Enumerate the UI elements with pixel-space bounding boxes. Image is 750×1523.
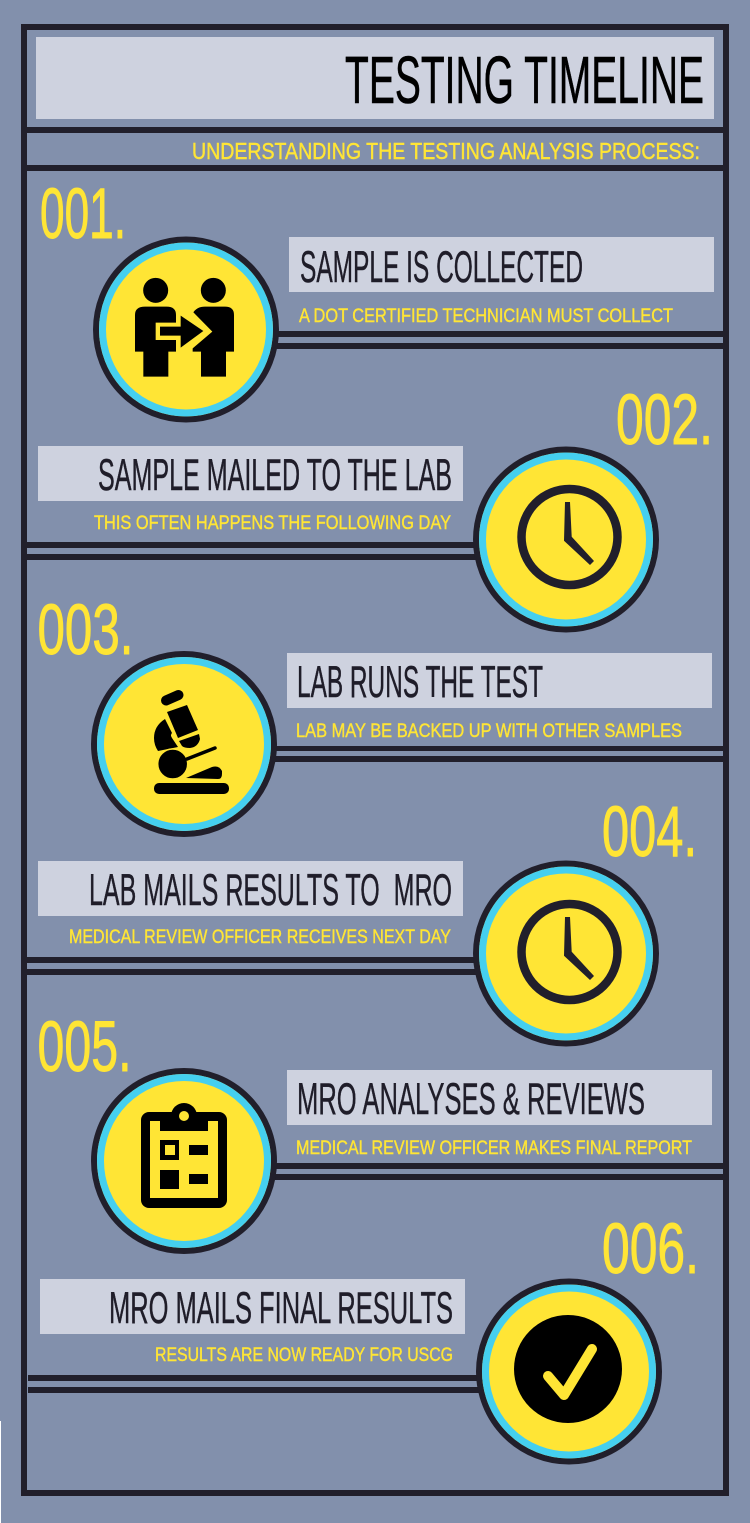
step 4 heading box: LAB MAILS RESULTS TO MRO [89, 866, 452, 915]
step 1 circle [96, 240, 276, 420]
step 1 [40, 175, 714, 420]
step 2 [38, 381, 713, 630]
icon: clock [522, 904, 618, 1000]
step 2 heading box: SAMPLE MAILED TO THE LAB [98, 451, 452, 500]
icon: two people exchanging sample [135, 278, 234, 377]
step 2 heading box [38, 446, 463, 501]
step 6 circle [479, 1282, 659, 1462]
step 4 number: 004. [602, 793, 697, 872]
step 4 [38, 793, 697, 1044]
step 2 circle [476, 450, 656, 630]
step 3 [38, 591, 712, 834]
step 2 description: THIS OFTEN HAPPENS THE FOLLOWING DAY [94, 512, 451, 534]
step 6 heading box: MRO MAILS FINAL RESULTS [109, 1284, 453, 1333]
step 3 description: LAB MAY BE BACKED UP WITH OTHER SAMPLES [296, 720, 682, 742]
step 4 circle [476, 864, 656, 1044]
step 5 number: 005. [38, 1008, 132, 1087]
step 3 number: 003. [38, 591, 134, 670]
step 6 number: 006. [602, 1210, 699, 1289]
step 5 circle [94, 1071, 274, 1251]
icon: clipboard checklist [141, 1103, 227, 1208]
icon: microscope [154, 695, 229, 794]
step 6 [40, 1210, 699, 1462]
step 1 number: 001. [40, 175, 126, 254]
step 4 description: MEDICAL REVIEW OFFICER RECEIVES NEXT DAY [69, 926, 451, 948]
icon: clock [522, 489, 618, 585]
step 6 description: RESULTS ARE NOW READY FOR USCG [155, 1344, 453, 1366]
step 3 circle [94, 654, 274, 834]
title banner [36, 37, 714, 119]
step 1 description: A DOT CERTIFIED TECHNICIAN MUST COLLECT [299, 305, 673, 327]
step 5 [38, 1008, 712, 1251]
icon: check mark [514, 1315, 622, 1423]
step 4 heading box [38, 861, 463, 916]
step 3 heading box: LAB RUNS THE TEST [297, 658, 543, 707]
step 6 heading box [40, 1279, 465, 1334]
